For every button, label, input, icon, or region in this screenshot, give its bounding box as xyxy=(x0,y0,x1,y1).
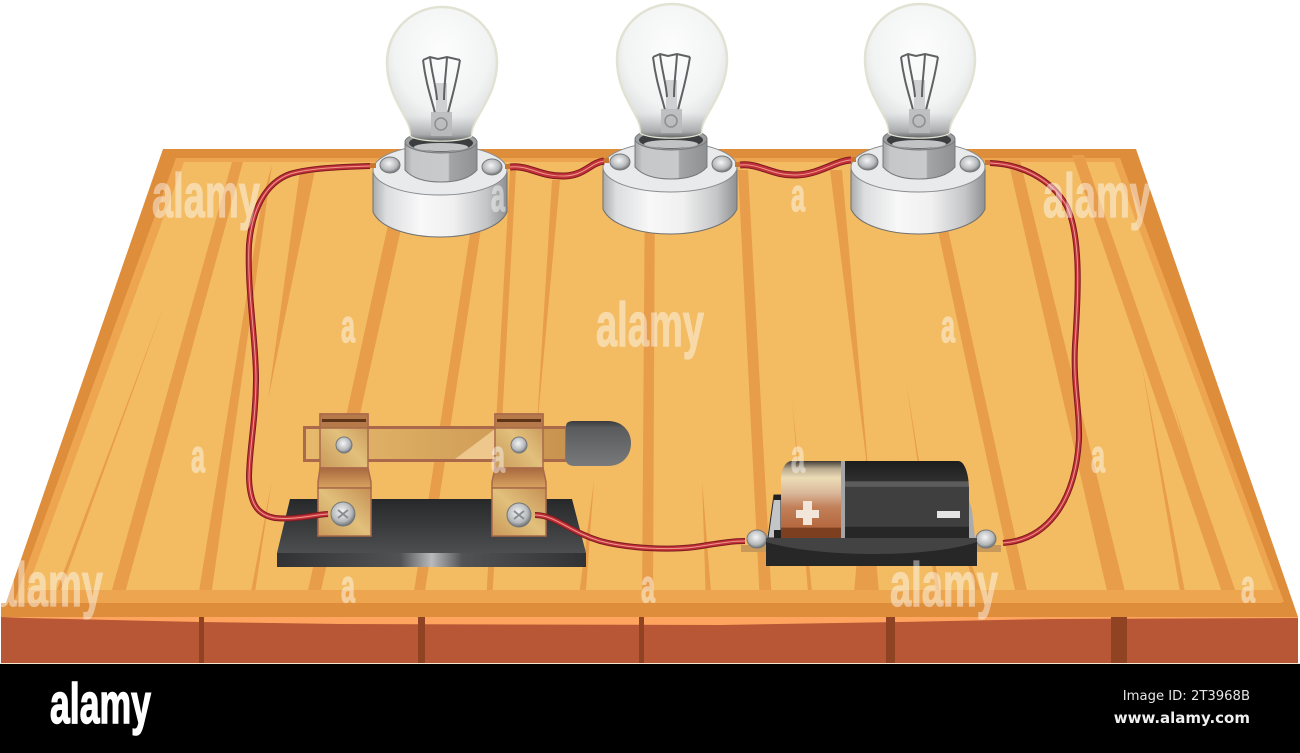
switch base xyxy=(277,499,586,553)
battery copper end xyxy=(781,461,843,538)
battery in holder xyxy=(741,461,1001,566)
wire: switch to battery xyxy=(535,515,745,549)
plus sign xyxy=(796,501,819,525)
left clip xyxy=(318,414,371,536)
watermarks xyxy=(0,162,1255,620)
watermark alamy top left: alamy xyxy=(152,162,260,231)
wire tips xyxy=(370,157,990,169)
plank gaps and grain xyxy=(56,155,1240,604)
knife switch xyxy=(277,414,631,567)
small watermark letters: a xyxy=(341,300,355,352)
wires xyxy=(249,160,1079,549)
light bulb 3 xyxy=(851,4,985,234)
watermark alamy top right: alamy xyxy=(1043,162,1151,231)
small watermark letters xyxy=(191,169,1255,612)
holder clips xyxy=(768,495,781,538)
wire: bulb 2 to bulb 3 xyxy=(740,160,851,175)
footer logo: alamy xyxy=(50,672,151,736)
right clip xyxy=(492,414,546,536)
image id: Image ID: 2T3968B xyxy=(1123,689,1250,704)
wire: switch to bulb 1 xyxy=(249,166,370,518)
switch blade xyxy=(304,428,566,460)
website url: www.alamy.com xyxy=(1114,709,1250,727)
small watermark letters: a xyxy=(191,430,205,482)
wire: bulb 1 to bulb 2 xyxy=(510,161,604,176)
small watermark letters: a xyxy=(941,300,955,352)
switch handle xyxy=(566,421,631,466)
small watermark letters: a xyxy=(1091,430,1105,482)
small watermark letters: a xyxy=(791,169,805,221)
small watermark letters: a xyxy=(1241,560,1255,612)
light bulb 2 xyxy=(603,4,737,234)
board front edge xyxy=(1,617,1298,663)
battery black body xyxy=(843,461,969,538)
minus sign xyxy=(937,511,960,518)
watermark alamy centre: alamy xyxy=(596,291,704,360)
small watermark letters: a xyxy=(491,430,505,482)
holder base xyxy=(766,538,977,566)
terminal tabs xyxy=(741,545,769,552)
watermark alamy bottom right: alamy xyxy=(890,551,998,620)
plank bottom rails xyxy=(14,590,1282,603)
wooden board xyxy=(1,149,1298,663)
watermark alamy bottom left: alamy xyxy=(0,551,103,620)
board top surface xyxy=(1,149,1298,617)
small watermark letters: a xyxy=(491,169,505,221)
small watermark letters: a xyxy=(641,560,655,612)
wire: bulb 3 to battery xyxy=(990,163,1079,543)
black footer bar xyxy=(0,663,1300,753)
plank field xyxy=(14,158,1284,602)
small watermark letters: a xyxy=(341,560,355,612)
light bulb 1 xyxy=(373,7,507,237)
small watermark letters: a xyxy=(791,430,805,482)
